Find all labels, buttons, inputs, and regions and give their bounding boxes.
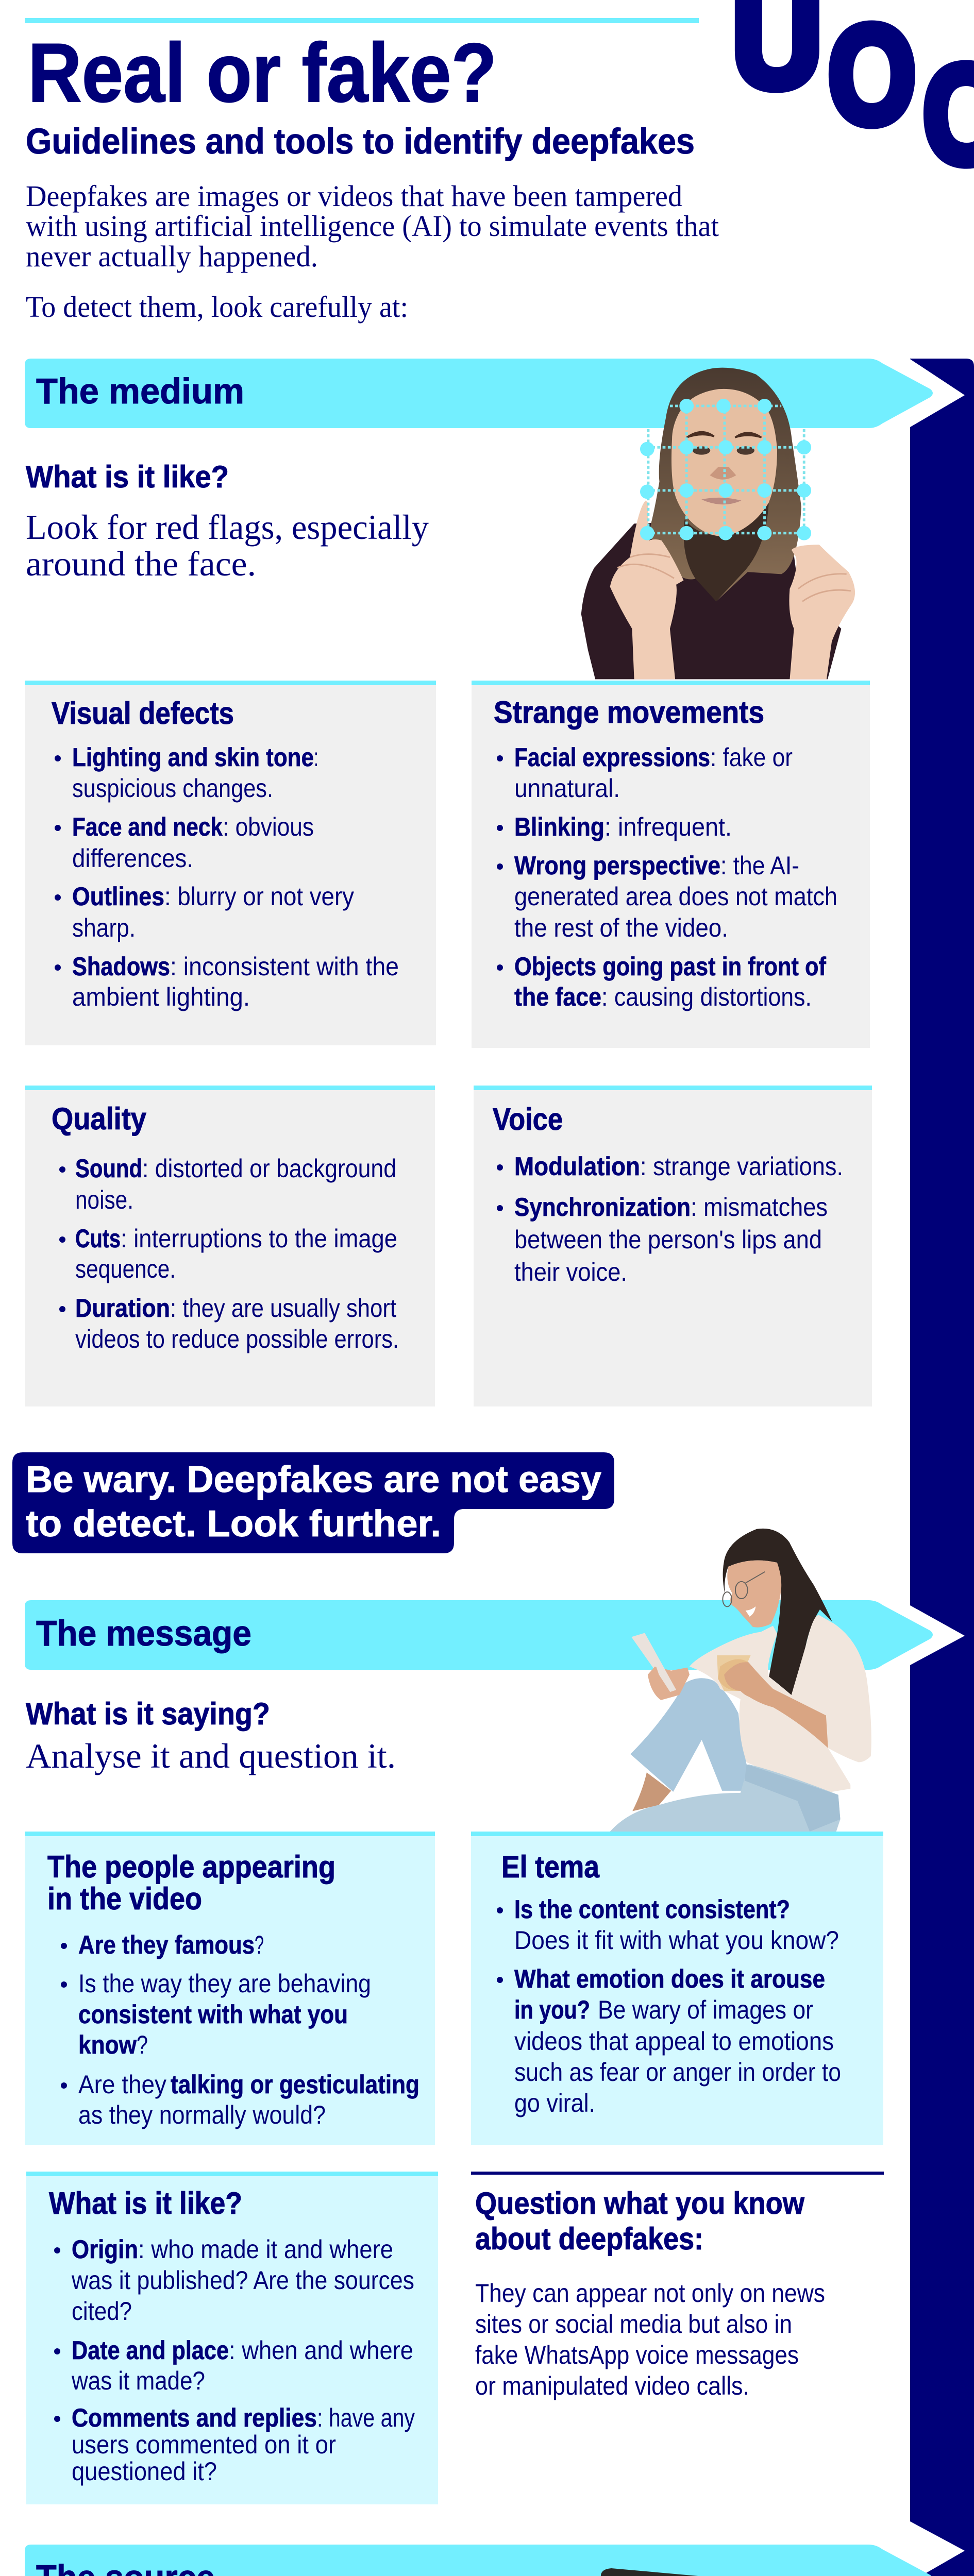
title: Real or fake?: [28, 26, 497, 120]
bullet: emotion: in you?: [514, 1995, 590, 2024]
bullet: behaving: ?: [137, 2030, 148, 2059]
bullet: synchronization: [497, 1193, 828, 1286]
bullet: comments: : have any: [317, 2403, 415, 2432]
bullet: behaving: Is the way they are behaving: [78, 1969, 371, 1998]
section banner: the source: [25, 2545, 933, 2576]
bullet: talking: [61, 2070, 419, 2129]
photo: woman with face-tracking grid: [581, 368, 855, 679]
bullet: consistent: Does it fit with what you know?: [514, 1926, 839, 1955]
bullet: face and neck: [55, 812, 314, 873]
bullet: outlines: [55, 882, 354, 942]
bullet: blinking: [497, 812, 732, 841]
bullet: cuts: Cuts: [75, 1224, 121, 1253]
logo: UOC top right: [732, 0, 974, 192]
bullet: duration: Duration: [75, 1294, 170, 1323]
bullet: emotion: such as fear or anger in order to: [514, 2058, 841, 2087]
top rule: [25, 18, 699, 23]
bullet: objects: the face: [514, 982, 601, 1011]
text block: or manipulated video calls.: [475, 2371, 749, 2400]
question: what is it like: What is it like?: [26, 460, 229, 494]
heading: Strange movements: [494, 695, 764, 730]
bullet: duration: [59, 1294, 399, 1353]
panel: the people appearing: [25, 1832, 435, 2145]
bullet: shadows: ambient lighting.: [72, 982, 250, 1011]
bullet: sound: Sound: [75, 1154, 142, 1183]
bullet: origin: was it published? Are the sources: [71, 2266, 414, 2295]
heading: about deepfakes:: [475, 2222, 703, 2256]
bullet: talking: talking or gesticulating: [171, 2070, 419, 2099]
bullet: wrong perspective: [497, 851, 837, 942]
bullet: duration: : they are usually short: [170, 1294, 396, 1323]
text block: [475, 2279, 825, 2400]
heading: Visual defects: [52, 696, 234, 731]
bullet: facial expressions: unnatural.: [514, 774, 620, 803]
photo: hands holding tablet with news: [538, 2568, 886, 2576]
intro text: never actually happened.: [26, 240, 318, 273]
bullet: behaving: consistent with what you: [78, 2000, 348, 2029]
section banner: the message: [25, 1600, 933, 1670]
bullet: origin: cited?: [72, 2297, 132, 2326]
bullet: comments: users commented on it or: [72, 2430, 336, 2459]
bullet: facial expressions: : fake or: [710, 743, 793, 772]
bullet: outlines: Outlines: [72, 882, 164, 911]
callout: be wary: [12, 1452, 614, 1553]
bullet: origin: [54, 2235, 414, 2326]
panel: strange movements: [472, 681, 870, 1048]
bullet: shadows: Shadows: [72, 952, 170, 981]
question: what is it saying: What is it saying?: [26, 1697, 270, 1731]
intro text: To detect them, look carefully at:: [26, 290, 408, 324]
text block: They can appear not only on news: [475, 2279, 825, 2308]
heading: El tema: [501, 1850, 600, 1884]
bullet: comments: Comments and replies: [72, 2403, 317, 2432]
bullet: famous: ?: [255, 1930, 264, 1959]
panel: what is it like (origin): [26, 2172, 438, 2504]
bullet: outlines: sharp.: [72, 913, 136, 942]
bullet: blinking: Blinking: [514, 812, 604, 841]
bullet: comments: questioned it?: [72, 2457, 217, 2486]
bullet: modulation: [497, 1152, 843, 1181]
bullet: comments: [54, 2403, 415, 2486]
lead text: Analyse it and question it.: [26, 1736, 396, 1775]
lead text: around the face.: [26, 544, 256, 583]
bullet: sound: : distorted or background: [142, 1154, 396, 1183]
bullet: talking: as they normally would?: [78, 2100, 326, 2129]
panel: quality: [25, 1086, 435, 1406]
bullet: origin: Origin: [72, 2235, 138, 2264]
callout: be wary: Be wary. Deepfakes are not easy: [26, 1459, 601, 1500]
section banner: the medium: The medium: [36, 371, 244, 411]
bullet: objects: Objects going past in front of: [514, 952, 826, 981]
bullet: consistent: [497, 1895, 839, 1955]
heading: [475, 2186, 804, 2256]
bullet: consistent: Is the content consistent?: [514, 1895, 790, 1924]
bullet: outlines: : blurry or not very: [164, 882, 354, 911]
heading: [47, 1850, 335, 1916]
bullet: wrong perspective: generated area does not match: [514, 882, 837, 911]
heading: in the video: [47, 1882, 202, 1916]
heading: What is it like?: [49, 2186, 242, 2221]
bullet: face and neck: differences.: [72, 844, 193, 873]
section banner: the message: The message: [36, 1613, 251, 1653]
bullet: wrong perspective: Wrong perspective: [514, 851, 720, 880]
bullet: origin: : who made it and where: [138, 2235, 393, 2264]
lead text: [26, 507, 429, 583]
panel: question what you know: [471, 2172, 884, 2400]
bullet: shadows: [55, 952, 399, 1011]
bullet: talking: Are they: [78, 2070, 166, 2099]
bullet: lighting: [55, 743, 318, 803]
bullet: date and place: : when and where: [229, 2336, 413, 2365]
bullet: sound: [59, 1154, 396, 1214]
heading: Quality: [52, 1101, 147, 1136]
bullet: emotion: videos that appeal to emotions: [514, 2027, 834, 2056]
bullet: famous: Are they famous: [78, 1930, 255, 1959]
intro text: Deepfakes are images or videos that have been tampered: [26, 179, 682, 213]
text block: fake WhatsApp voice messages: [475, 2341, 799, 2369]
bullet: emotion: What emotion does it arouse: [514, 1964, 825, 1993]
bullet: emotion: Be wary of images or: [598, 1995, 813, 2024]
bullet: cuts: sequence.: [75, 1255, 176, 1283]
panel: el tema: [471, 1832, 883, 2145]
bullet: modulation: Modulation: [514, 1152, 640, 1181]
bullet: shadows: : inconsistent with the: [170, 952, 399, 981]
photo: woman with phone sitting: [610, 1529, 871, 1832]
heading: The people appearing: [47, 1850, 335, 1884]
panel: voice: [474, 1086, 872, 1406]
panel: visual defects: [25, 681, 436, 1045]
heading: Question what you know: [475, 2186, 804, 2221]
bullet: date and place: [54, 2336, 413, 2395]
callout: be wary: to detect. Look further.: [26, 1503, 441, 1545]
bullet: date and place: Date and place: [72, 2336, 229, 2365]
lead text: Look for red flags, especially: [26, 507, 429, 547]
bullet: blinking: : infrequent.: [604, 812, 732, 841]
bullet: modulation: : strange variations.: [640, 1152, 843, 1181]
bullet: cuts: : interruptions to the image: [121, 1224, 397, 1253]
bullet: duration: videos to reduce possible errors.: [75, 1325, 399, 1353]
text block: sites or social media but also in: [475, 2310, 792, 2338]
bullet: face and neck: : obvious: [223, 812, 314, 841]
bullet: synchronization: : mismatches: [691, 1193, 828, 1222]
bullet: emotion: [497, 1964, 841, 2117]
bullet: objects: : causing distortions.: [601, 982, 812, 1011]
section banner: the medium: [25, 359, 933, 428]
bullet: wrong perspective: : the AI-: [720, 851, 799, 880]
bullet: lighting: Lighting and skin tone: [72, 743, 314, 772]
bullet: cuts: [59, 1224, 397, 1283]
bullet: synchronization: between the person's lips and: [514, 1225, 822, 1254]
bullet: synchronization: Synchronization: [514, 1193, 691, 1222]
bullet: facial expressions: Facial expressions: [514, 743, 710, 772]
bullet: objects: [497, 952, 826, 1011]
bullet: sound: noise.: [75, 1185, 133, 1214]
bullet: lighting: :: [314, 743, 318, 772]
sidebar: navy vertical bar with checkmark end: [910, 359, 974, 2576]
subtitle: Guidelines and tools to identify deepfakes: [26, 121, 695, 161]
bullet: facial expressions: [497, 743, 793, 803]
bullet: date and place: was it made?: [71, 2366, 205, 2395]
bullet: wrong perspective: the rest of the video.: [514, 913, 728, 942]
bullet: face and neck: Face and neck: [72, 812, 223, 841]
logo: UOC top right: O: [828, 0, 916, 152]
bullet: emotion: go viral.: [514, 2089, 595, 2117]
bullet: lighting: suspicious changes.: [72, 774, 273, 803]
intro text: [26, 179, 719, 324]
heading: Voice: [493, 1102, 563, 1137]
bullet: behaving: [61, 1969, 371, 2059]
intro text: with using artificial intelligence (AI) to simulate events that: [26, 209, 719, 243]
bullet: synchronization: their voice.: [514, 1258, 627, 1286]
bullet: behaving: know: [78, 2030, 137, 2059]
